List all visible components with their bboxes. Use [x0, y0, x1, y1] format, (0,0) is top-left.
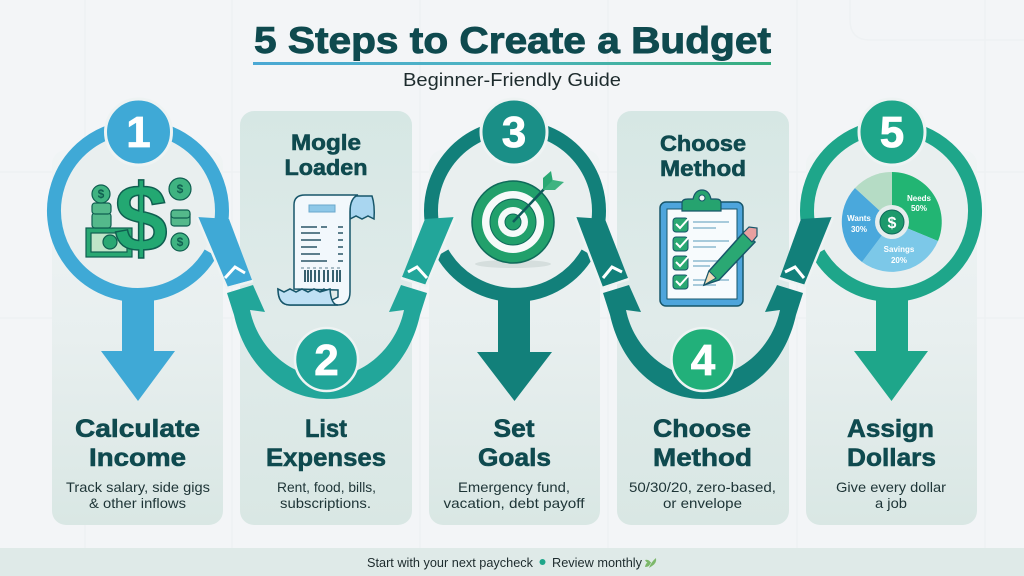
text: step 3: Set	[494, 415, 535, 443]
arrow: band to step 3	[401, 217, 455, 286]
panel: step 3 background	[429, 150, 600, 525]
heading: Choose Method (panel): Method	[660, 156, 746, 181]
footer bar: Review monthly	[552, 556, 643, 570]
chart: budget pie	[842, 172, 942, 272]
heading: Mogle Loaden	[284, 130, 368, 180]
chart: budget pie: Needs	[907, 194, 932, 203]
ring 5 with down arrow	[807, 127, 975, 401]
text: step 3: vacation, debt payoff	[444, 495, 585, 511]
text: step 5	[836, 415, 946, 511]
icon: clipboard with pencil	[660, 190, 757, 306]
text: step 1	[66, 415, 210, 511]
ring 1 with down arrow	[54, 127, 222, 401]
number badge 5	[859, 99, 925, 165]
text: step 4: Method	[653, 444, 752, 472]
chart: budget pie: Wants	[847, 214, 871, 223]
arrow: U connector step 2	[227, 285, 427, 399]
panel: step 5 background	[806, 150, 977, 525]
panel: step 1 background	[52, 150, 223, 525]
number badge 3	[481, 99, 547, 165]
number badge 2: 2	[314, 336, 339, 385]
number badge 5: 5	[880, 108, 904, 157]
footer bar	[0, 548, 1024, 576]
heading: Choose Method (panel)	[660, 131, 746, 181]
text: step 4: 50/30/20, zero-based,	[629, 479, 776, 495]
text: step 5: Give every dollar	[836, 479, 946, 495]
chart: budget pie: 30%	[851, 225, 867, 234]
chart: budget pie: 50%	[911, 204, 927, 213]
text: step 3: Emergency fund,	[458, 479, 570, 495]
icon: money: $	[177, 182, 184, 196]
chart: budget pie: 20%	[891, 256, 907, 265]
text: step 1: Track salary, side gigs	[66, 479, 210, 495]
text: step 3: Goals	[478, 444, 551, 472]
number badge 1: 1	[126, 108, 151, 157]
text: step 2	[266, 415, 386, 511]
text: step 1: Income	[89, 444, 186, 472]
chart: budget pie: $	[888, 215, 897, 232]
icon: money	[86, 165, 191, 272]
subtitle: Beginner-Friendly Guide	[403, 70, 621, 90]
title: 5 Steps to Create a Budget	[254, 20, 771, 61]
icon: money: $	[114, 165, 168, 272]
number badge 3: 3	[502, 108, 526, 157]
arrow: U connector step 4	[603, 285, 803, 399]
panel: step 2 background	[240, 111, 412, 525]
text: step 5: Assign	[847, 415, 934, 443]
text: step 2: List	[305, 415, 348, 443]
text: step 4	[629, 415, 776, 511]
text: step 2: subscriptions.	[280, 495, 371, 511]
title underline	[253, 62, 771, 65]
footer bar: Start with your next paycheck	[367, 556, 534, 570]
number badge 4	[672, 328, 734, 391]
text: step 4: or envelope	[663, 495, 742, 511]
arrow: band from step 1	[197, 217, 253, 288]
number badge 1	[106, 99, 172, 165]
text: step 3	[444, 415, 585, 511]
text: step 2: Rent, food, bills,	[277, 479, 376, 495]
chart: budget pie: Savings	[884, 245, 915, 254]
text: step 2: Expenses	[266, 444, 386, 472]
arrow: band from step 3	[575, 217, 629, 288]
number badge 4: 4	[691, 336, 716, 385]
text: step 1: & other inflows	[89, 495, 186, 511]
icon: money: $	[98, 187, 105, 201]
number badge 2	[295, 328, 358, 391]
text: step 5: Dollars	[847, 444, 936, 472]
text: step 1: Calculate	[75, 415, 200, 443]
heading: Choose Method (panel): Choose	[660, 131, 746, 156]
icon: target	[472, 171, 564, 268]
arrow: band to step 5	[779, 217, 833, 286]
icon: receipt	[278, 195, 374, 305]
text: step 4: Choose	[653, 415, 751, 443]
text: step 5: a job	[875, 495, 907, 511]
heading: Mogle Loaden: Loaden	[284, 155, 368, 180]
ring 3 with down arrow	[431, 127, 599, 401]
heading: Mogle Loaden: Mogle	[291, 130, 361, 155]
panel: step 4 background	[617, 111, 789, 525]
icon: money: $	[177, 235, 184, 249]
